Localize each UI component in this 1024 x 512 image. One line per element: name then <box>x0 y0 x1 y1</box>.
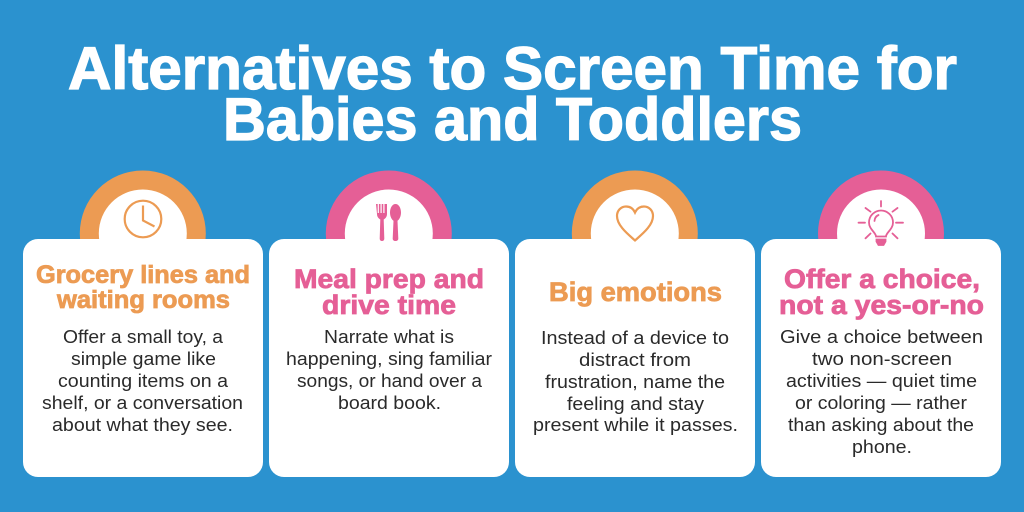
body text: about what they see. <box>52 415 233 435</box>
heading <box>36 261 250 314</box>
body text: Narrate what is <box>324 327 454 347</box>
heading: drive time <box>322 290 456 320</box>
body text: two non-screen <box>812 349 952 369</box>
body text: simple game like <box>71 349 216 369</box>
card <box>269 239 509 477</box>
heading: Offer a choice, <box>784 264 980 294</box>
heading: not a yes-or-no <box>779 290 984 320</box>
icon: heart <box>617 206 653 240</box>
heading: Big emotions <box>549 277 722 307</box>
body text: Instead of a device to <box>541 328 729 348</box>
title <box>68 35 957 153</box>
body text <box>286 327 492 413</box>
body text: than asking about the <box>788 415 974 435</box>
body text: Offer a small toy, a <box>63 327 224 347</box>
arch: orange <box>80 170 206 296</box>
title: Alternatives to Screen Time for <box>68 35 957 102</box>
arch: orange <box>572 170 698 296</box>
body text: activities — quiet time <box>786 371 977 391</box>
icon: clock <box>125 201 161 237</box>
icon: fork and spoon <box>376 204 401 241</box>
body text <box>533 328 738 435</box>
body text: present while it passes. <box>533 415 738 435</box>
heading: Meal prep and <box>294 264 484 294</box>
arch: pink <box>326 170 452 296</box>
arch: pink <box>818 170 944 296</box>
icon: light bulb <box>858 201 903 245</box>
body text <box>42 327 243 435</box>
heading <box>294 264 484 320</box>
body text: happening, sing familiar <box>286 349 492 369</box>
body text: shelf, or a conversation <box>42 393 243 413</box>
card <box>23 239 263 477</box>
body text: frustration, name the <box>545 372 725 392</box>
panel: grocery lines and waiting rooms <box>23 170 263 477</box>
card <box>515 239 755 477</box>
panel: meal prep and drive time <box>269 170 509 477</box>
panel: offer a choice <box>761 170 1001 477</box>
heading: waiting rooms <box>56 286 230 314</box>
body text: counting items on a <box>58 371 229 391</box>
body text: songs, or hand over a <box>297 371 483 391</box>
body text: board book. <box>338 393 441 413</box>
title: Babies and Toddlers <box>223 86 802 153</box>
body text <box>780 327 983 457</box>
body text: feeling and stay <box>567 394 704 414</box>
card <box>761 239 1001 477</box>
body text: or coloring — rather <box>795 393 967 413</box>
heading: Grocery lines and <box>36 261 250 289</box>
body text: Give a choice between <box>780 327 983 347</box>
heading <box>779 264 984 320</box>
panel: big emotions <box>515 170 755 477</box>
body text: distract from <box>579 350 691 370</box>
body text: phone. <box>852 437 912 457</box>
